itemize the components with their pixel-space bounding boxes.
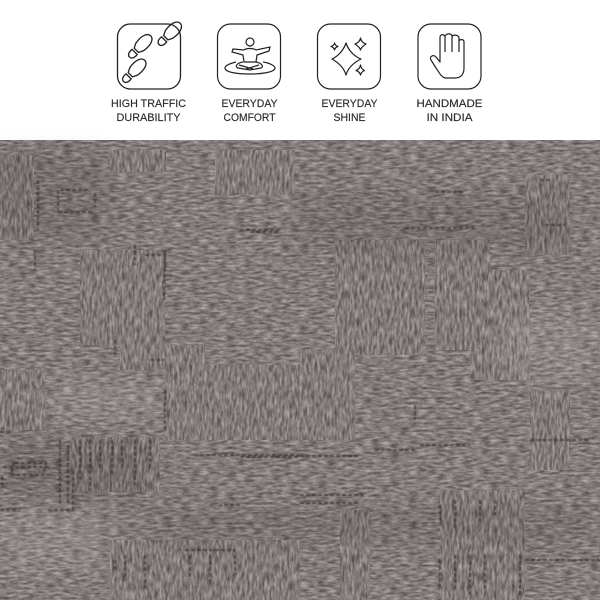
label: HANDMADE xyxy=(416,98,482,110)
label xyxy=(111,98,186,124)
feature: high traffic durability xyxy=(111,19,186,124)
icon: meditating figure xyxy=(218,24,280,89)
icon: hand xyxy=(418,24,481,89)
label: DURABILITY xyxy=(116,112,181,124)
label: EVERYDAY xyxy=(322,98,378,110)
label xyxy=(416,98,482,124)
feature: everyday comfort xyxy=(218,24,280,124)
feature: handmade in india xyxy=(416,24,482,124)
label: COMFORT xyxy=(224,112,276,124)
rug texture xyxy=(0,140,600,600)
label: IN INDIA xyxy=(426,112,473,124)
label xyxy=(222,98,278,124)
dark tonal bands xyxy=(0,150,600,540)
dark woven marks xyxy=(0,180,600,595)
feature: everyday shine xyxy=(318,24,380,124)
icon: footprints xyxy=(118,19,184,89)
icon: sparkles xyxy=(318,24,380,89)
label xyxy=(322,98,378,124)
label: EVERYDAY xyxy=(222,98,278,110)
label: HIGH TRAFFIC xyxy=(111,98,186,110)
label: SHINE xyxy=(334,112,366,124)
